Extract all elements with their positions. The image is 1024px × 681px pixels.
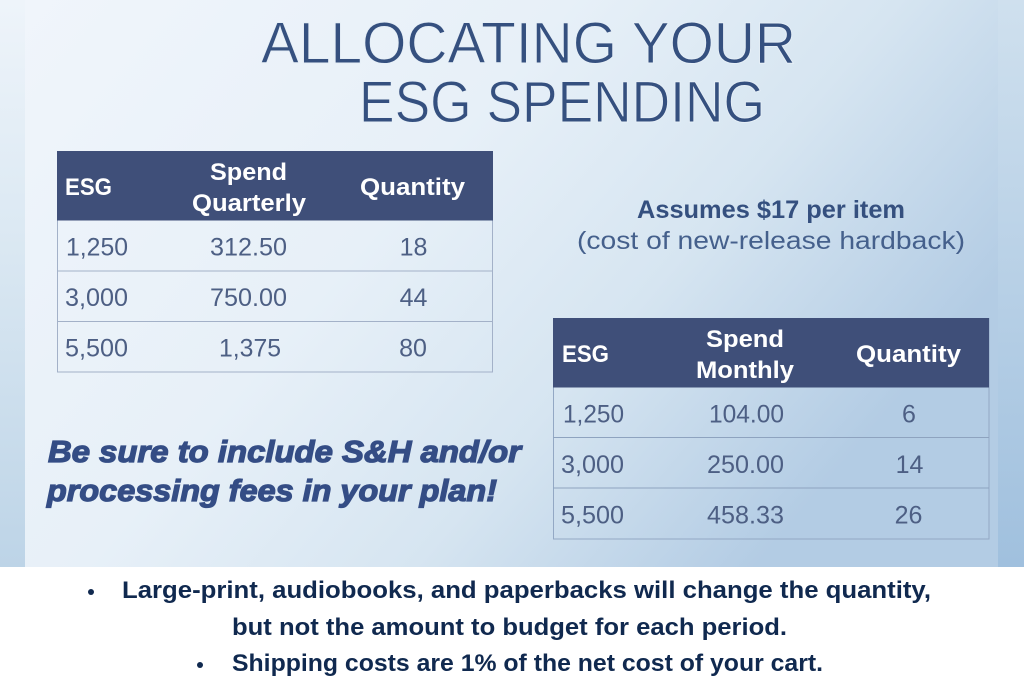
quarterly table rows [65,234,427,362]
quarterly table rows: 1,250 [66,234,128,262]
title: ALLOCATING YOUR [261,11,796,76]
quarterly table header: Spend [210,159,287,186]
quarterly table rows: 5,500 [65,334,128,362]
quarterly table header [57,151,493,220]
quarterly table header: Quantity [360,174,466,201]
callout: shipping and handling reminder: processing fees in your plan! [46,473,497,508]
price assumption note: Assumes $17 per item [637,196,905,224]
monthly table rows: 3,000 [561,451,624,479]
monthly table header: ESG [562,341,609,368]
monthly table header: Monthly [696,357,795,384]
quarterly table rows: 18 [400,234,427,262]
monthly table rows: 6 [902,400,916,428]
table: monthly spend [553,318,989,539]
monthly table rows [561,400,923,530]
monthly table rows: 250.00 [707,451,784,479]
monthly table header: Spend [706,326,784,353]
quarterly table rows: 3,000 [65,284,128,312]
note: formats: Large-print, audiobooks, and paperbacks will change the quantity, [122,577,931,604]
quarterly table header: ESG [65,174,112,201]
callout: shipping and handling reminder [46,434,523,508]
table: quarterly spend [57,151,493,372]
monthly table header [553,318,989,388]
price assumption note: (cost of new-release hardback) [577,227,965,255]
quarterly table rows: 1,375 [219,334,281,362]
monthly table rows: 104.00 [709,400,784,428]
price assumption note [577,196,965,255]
callout: shipping and handling reminder: Be sure to include S&H and/or [48,434,523,469]
quarterly table rows: 750.00 [210,284,287,312]
monthly table rows: 26 [895,502,922,530]
monthly table header: Quantity [856,341,962,368]
monthly table rows: 5,500 [561,502,624,530]
quarterly table rows: 44 [400,284,427,312]
title [261,11,796,135]
quarterly table header: Quarterly [192,190,307,217]
note: shipping: Shipping costs are 1% of the net cost of your cart. [232,650,823,677]
title: ESG SPENDING [359,70,765,135]
note: formats: but not the amount to budget for each period. [232,614,787,641]
quarterly table rows: 80 [399,334,427,362]
monthly table rows: 1,250 [563,400,624,428]
monthly table rows: 14 [896,451,923,479]
footer notes [88,577,931,677]
monthly table rows: 458.33 [707,502,784,530]
note: formats [88,577,931,641]
quarterly table rows: 312.50 [210,234,287,262]
